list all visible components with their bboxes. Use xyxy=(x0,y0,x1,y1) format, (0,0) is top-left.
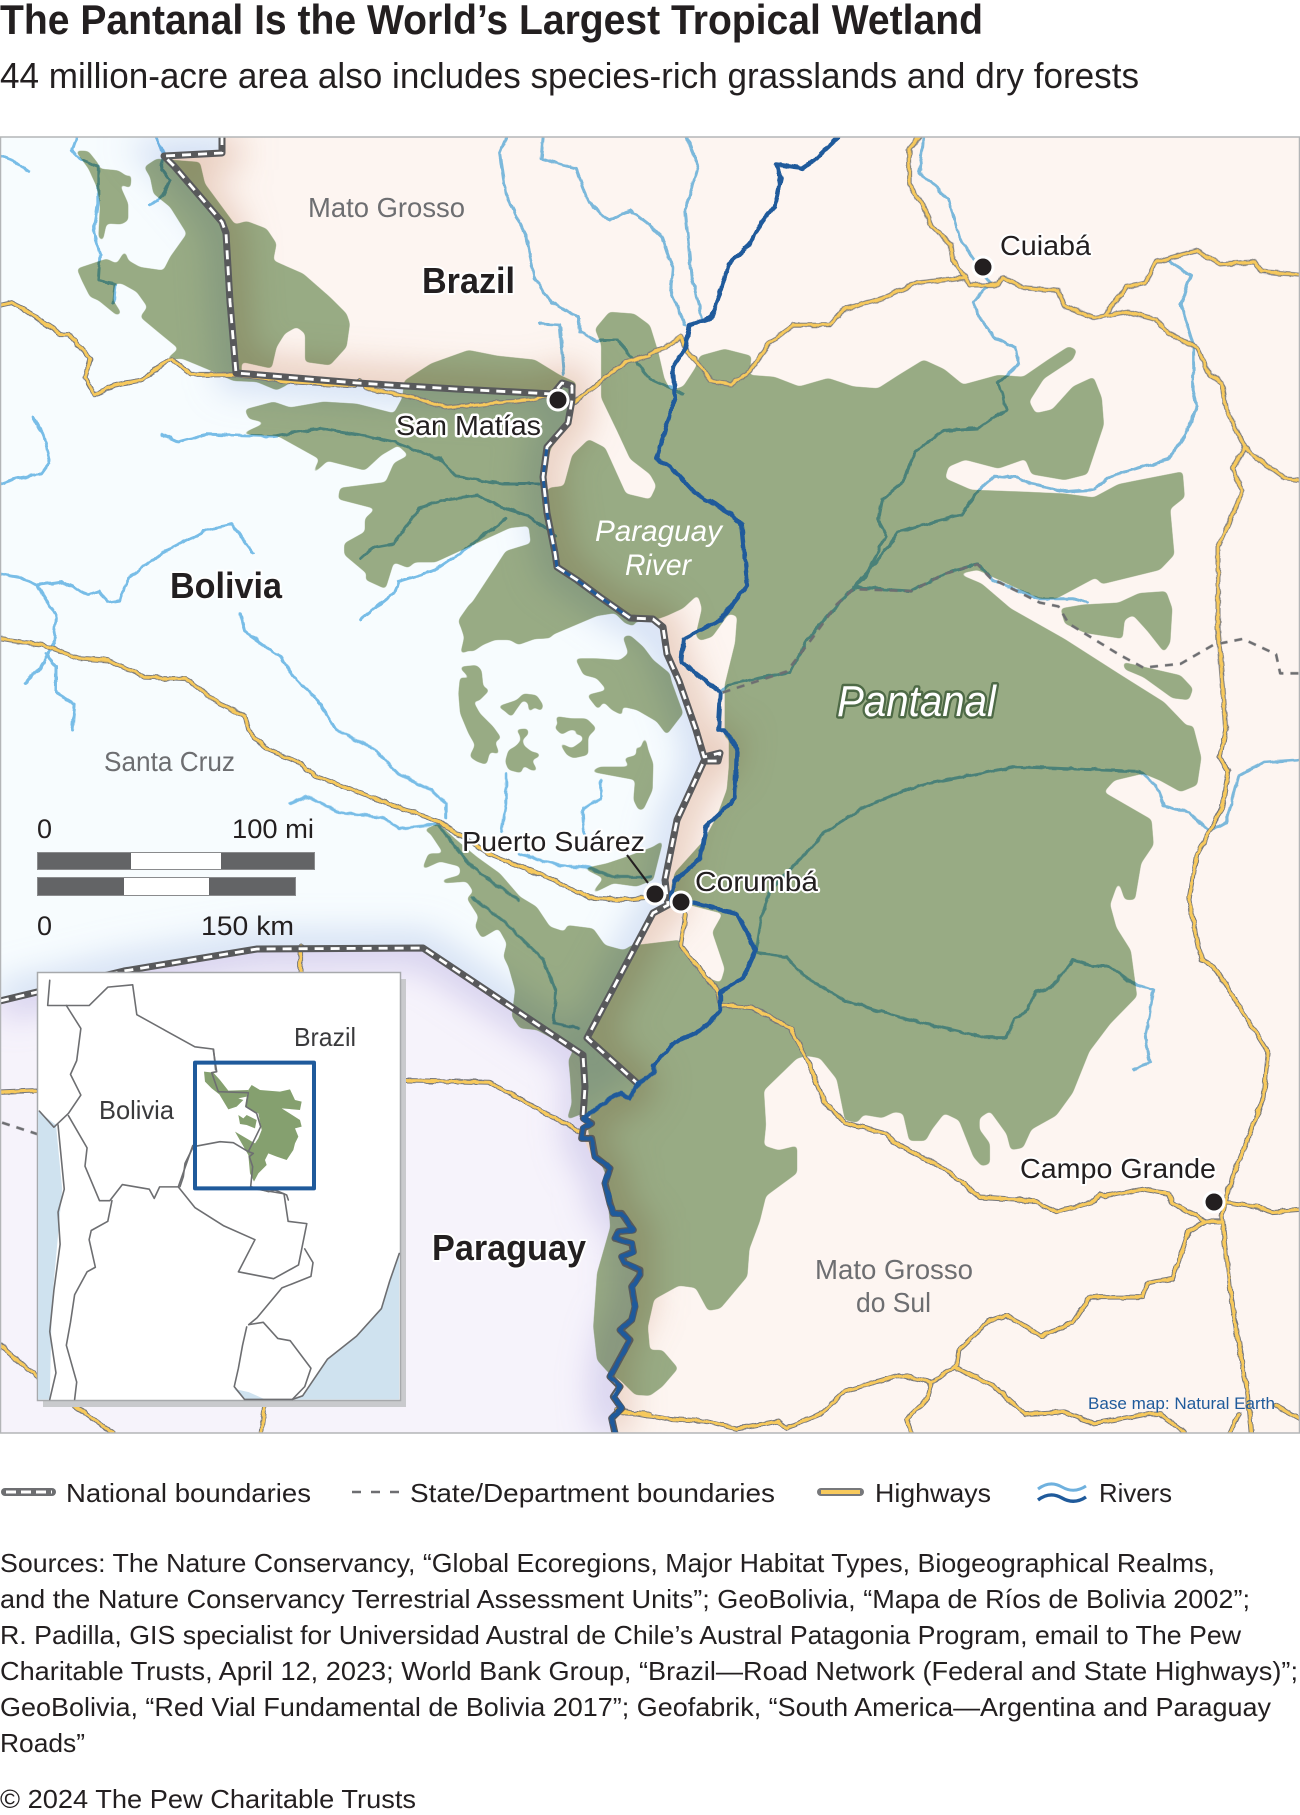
state boundaries xyxy=(2,564,1300,1134)
city: San Matías: San Matías xyxy=(396,410,541,441)
city: San Matías xyxy=(396,390,568,441)
Paraguay River xyxy=(582,137,839,1433)
label: Mato Grosso: Mato Grosso xyxy=(308,192,465,223)
legend: national boundaries: National boundaries xyxy=(66,1478,311,1508)
sources: Sources: The Nature Conservancy, “Global Ecoregions, Major Habitat Types, Biogeographical Realms, xyxy=(0,1548,1215,1578)
Pantanal wetland area xyxy=(75,150,1201,1396)
border dashes along the river xyxy=(612,1376,616,1413)
scale bar xyxy=(37,814,314,941)
region: Brazil xyxy=(172,138,1298,1432)
city: Puerto Suárez: Puerto Suárez xyxy=(462,826,645,857)
inset locator map xyxy=(38,972,406,1407)
city: Cuiabá xyxy=(973,230,1091,277)
subtitle: 44 million-acre area also includes species-rich grasslands and dry forests xyxy=(0,55,1139,96)
scale bar: 150 km xyxy=(201,911,294,941)
label: Brazil: Brazil xyxy=(422,260,515,301)
label: Mato Grosso do Sul: do Sul xyxy=(856,1287,931,1318)
sources: R. Padilla, GIS specialist for Universidad Austral de Chile’s Austral Patagonia Program, email to The Pew xyxy=(0,1620,1241,1650)
label: Paraguay River xyxy=(596,520,724,576)
legend: rivers: Rivers xyxy=(1099,1478,1172,1508)
region: Paraguay xyxy=(0,948,638,1433)
city: Corumbá xyxy=(671,866,818,912)
sources: Charitable Trusts, April 12, 2023; World Bank Group, “Brazil—Road Network (Federal and State Highways)”; xyxy=(0,1656,1298,1686)
legend: highways: Highways xyxy=(875,1478,991,1508)
panel: map xyxy=(0,136,1300,1433)
legend xyxy=(5,1478,1172,1508)
label: Mato Grosso do Sul: Mato Grosso xyxy=(815,1254,973,1285)
label: Paraguay River: River xyxy=(625,549,692,582)
city: Campo Grande: Campo Grande xyxy=(1020,1153,1216,1184)
national boundaries xyxy=(0,136,720,1433)
sources: Roads” xyxy=(0,1728,85,1758)
Paraguay–Brazil boundary along the river xyxy=(582,1118,640,1433)
border shadow: Bolivia side xyxy=(0,136,720,1117)
sources: GeoBolivia, “Red Vial Fundamental de Bolivia 2017”; Geofabrik, “South America—Argentina and Paraguay xyxy=(0,1692,1271,1722)
label: Paraguay River: Paraguay xyxy=(595,515,724,548)
city: Cuiabá: Cuiabá xyxy=(1000,230,1091,261)
legend: rivers xyxy=(1038,1478,1172,1508)
rivers: tributaries xyxy=(0,137,1300,1069)
label: Pantanal: Pantanal xyxy=(837,677,997,726)
map frame xyxy=(0,137,1300,1433)
scale bar: 0 xyxy=(37,814,52,844)
border shadow: Brazil side xyxy=(164,136,720,1433)
label: Mato Grosso do Sul xyxy=(815,1254,973,1318)
sources: and the Nature Conservancy Terrestrial Assessment Units”; GeoBolivia, “Mapa de Ríos de Bolivia 2002”; xyxy=(0,1584,1250,1614)
sources xyxy=(0,1548,1298,1758)
inset label: Bolivia: Bolivia xyxy=(99,1095,175,1125)
river along the Bolivia border xyxy=(543,447,630,618)
city: Corumbá: Corumbá xyxy=(695,866,818,897)
scale bar: 100 mi xyxy=(232,814,314,844)
highways xyxy=(0,137,1300,1433)
label: Paraguay: Paraguay xyxy=(432,1227,586,1268)
copyright: © 2024 The Pew Charitable Trusts xyxy=(0,1784,416,1814)
region: Bolivia xyxy=(2,138,701,1004)
city: Campo Grande xyxy=(1020,1153,1224,1212)
city: Puerto Suárez xyxy=(462,826,665,904)
inset label: Brazil: Brazil xyxy=(294,1022,356,1052)
label: Santa Cruz: Santa Cruz xyxy=(104,746,235,777)
label: Bolivia: Bolivia xyxy=(170,565,283,606)
scale bar: 0 xyxy=(37,911,52,941)
border shadow: Paraguay side xyxy=(0,948,634,1433)
base map credit: Base map: Natural Earth xyxy=(1088,1394,1275,1413)
legend: state boundaries: State/Department boundaries xyxy=(410,1478,775,1508)
